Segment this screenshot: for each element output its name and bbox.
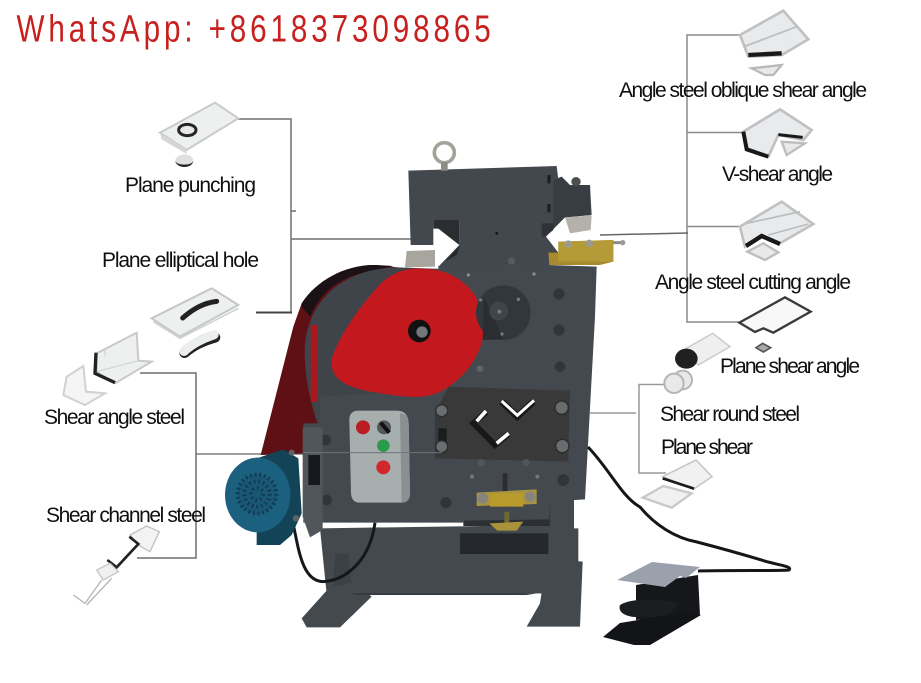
leader lines: lower left bracket xyxy=(137,373,441,558)
icon: plane shear xyxy=(643,460,712,508)
label: plane elliptical hole: Plane elliptical hole xyxy=(102,249,259,272)
base and feet xyxy=(302,500,583,627)
motor cable xyxy=(293,523,375,582)
icon: plane punching xyxy=(160,103,238,167)
icon: shear angle steel xyxy=(63,333,152,405)
red strip on guard xyxy=(311,325,317,402)
foot pedal xyxy=(603,562,701,645)
label: shear channel steel: Shear channel steel xyxy=(46,504,206,527)
side bolts xyxy=(320,232,569,508)
foot pedal cable and main cable xyxy=(588,447,790,571)
title: WhatsApp number: WhatsApp: +8618373098865 xyxy=(16,8,491,50)
label: shear angle steel: Shear angle steel xyxy=(44,406,185,429)
leader lines: lower right bracket xyxy=(590,384,666,473)
leader lines: top left bracket xyxy=(238,119,411,312)
control box xyxy=(349,411,410,503)
electric motor xyxy=(225,449,302,545)
leader lines: right bracket xyxy=(600,35,742,322)
label: plane punching: Plane punching xyxy=(125,174,256,197)
icon: shear round steel xyxy=(664,333,730,393)
label: shear round steel: Shear round steel xyxy=(660,403,800,426)
grey rear housing xyxy=(305,267,473,430)
label: angle steel cutting angle: Angle steel cutting angle xyxy=(655,271,851,294)
icon: angle steel cutting angle xyxy=(740,202,813,260)
icon: shear channel steel xyxy=(73,526,159,605)
punch block xyxy=(405,250,435,267)
eye bolt xyxy=(434,143,454,171)
top right clamp and brass guide xyxy=(548,215,625,265)
label: angle steel oblique shear angle: Angle steel oblique shear angle xyxy=(619,79,867,102)
main body xyxy=(303,265,597,523)
round gear plate xyxy=(476,285,531,340)
label: V-shear angle: V-shear angle xyxy=(722,163,833,186)
label: plane shear angle: Plane shear angle xyxy=(720,355,860,378)
icon: plane shear angle xyxy=(739,297,811,352)
lead line across machine xyxy=(303,451,442,454)
icon: V-shear angle xyxy=(743,109,812,157)
red rear guard xyxy=(261,265,407,455)
icon: plane elliptical hole xyxy=(152,288,238,353)
label: plane shear: Plane shear xyxy=(661,436,753,459)
base recess xyxy=(460,533,548,554)
icon: angle steel oblique shear angle xyxy=(740,11,808,75)
red flywheel cover xyxy=(332,268,484,397)
shear die plate xyxy=(435,387,570,466)
upper frame with shear slots xyxy=(408,166,592,267)
lower brass clamp xyxy=(477,473,537,531)
motor mount bracket xyxy=(303,427,323,537)
machine xyxy=(225,143,625,627)
